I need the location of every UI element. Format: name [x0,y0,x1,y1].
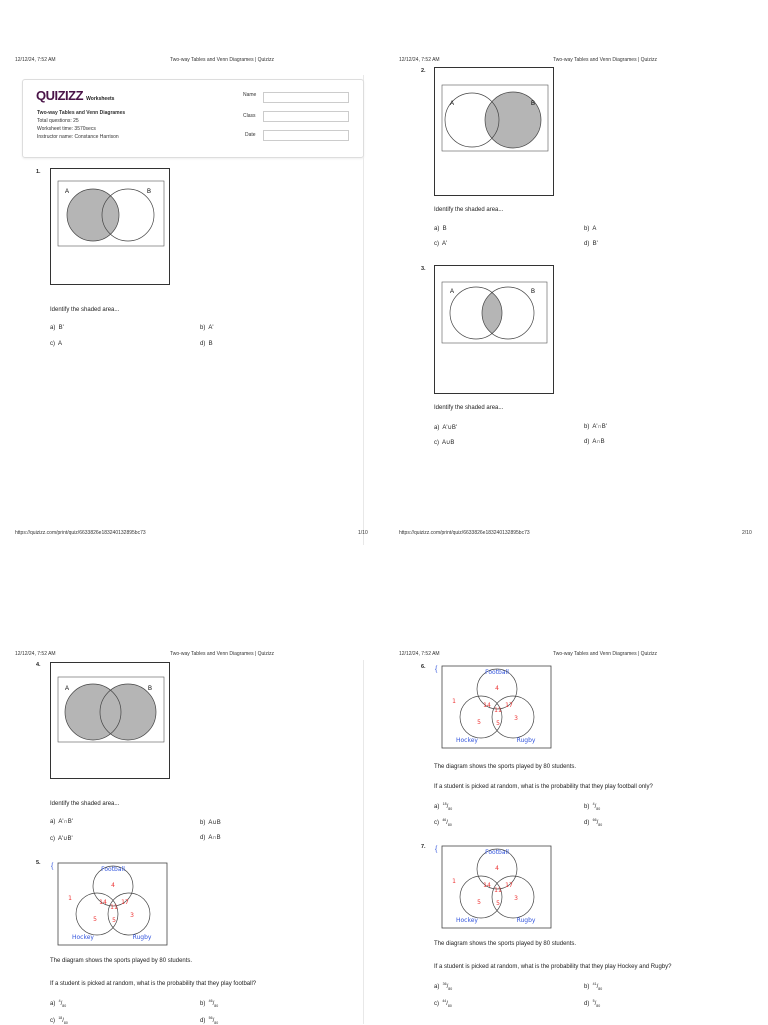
text: Two-way Tables and Venn Diagrames | Quizizz [170,651,274,657]
text: 1/10 [358,530,368,536]
page 4 header: 12/12/24, 7:52 AM [399,651,440,657]
worksheet details: Total questions: 25 [37,118,79,124]
question 3: b) A'∩B' [584,424,607,430]
sports venn diagram: 3 [130,912,134,919]
question 6 [421,664,653,827]
sports venn diagram: 1 [452,698,456,705]
question 6: b) 4 /80 [584,802,600,811]
logo: QUIZIZZ Worksheets [36,88,114,103]
question 6: a) 18 /80 [434,802,452,811]
sports venn diagram [435,666,552,748]
worksheet details: Instructor name: Constance Harrison [37,134,119,140]
sports venn diagram: Rugby [517,917,536,924]
question 4: c) A'∪B' [50,836,73,842]
worksheet info panel: Date [245,132,256,138]
sports venn diagram: 11 [494,707,502,714]
question 2: a) B [434,226,447,232]
question 7 [421,844,672,1008]
question 7: c) 44 /80 [434,999,452,1008]
sports venn diagram: Football [101,866,125,873]
sports venn diagram: 17 [505,702,513,709]
sports venn diagram: 5 [496,720,500,727]
question 3: d) A∩B [584,439,605,445]
page 2 header: 12/12/24, 7:52 AM [399,57,440,63]
sports venn diagram [435,846,552,928]
worksheet details: Worksheet time: 3570secs [37,126,96,132]
sports venn diagram: 14 [483,702,491,709]
sports venn diagram: { [435,846,438,853]
sports venn diagram: 4 [495,685,499,692]
question 1: c) A [50,341,62,347]
question 4: d) A∩B [200,835,221,841]
worksheet details: Two-way Tables and Venn Diagrames [37,110,125,116]
sports venn diagram: Football [485,849,509,856]
sports venn diagram: Rugby [133,934,152,941]
question 5: d) 56 /80 [200,1016,218,1025]
question 2: 2. [421,68,426,74]
venn diagram: union shaded [50,662,170,779]
question 5: b) 46 /80 [200,999,218,1008]
question 6: 6. [421,664,426,670]
question 1: 1. [36,169,41,175]
question 2: b) A [584,226,596,232]
question 3 [421,265,607,446]
sports venn diagram: Hockey [456,917,478,924]
sports venn diagram: 5 [477,899,481,906]
venn diagram: A shaded: B [147,189,151,195]
page 2 footer: https://quizizz.com/print/quiz/6633826e183240132895bc73 [399,530,530,536]
sports venn diagram: { [51,863,54,870]
sports venn diagram: 4 [495,865,499,872]
question 5: a) 4 /80 [50,999,66,1008]
venn diagram: B shaded [434,67,554,196]
question 7: If a student is picked at random, what is the probability that they play Hockey and Rugby? [434,964,671,970]
page 3 header: 12/12/24, 7:52 AM [15,651,56,657]
question 4: 4. [36,662,41,668]
worksheet info panel [22,79,364,158]
question 7: b) 41 /80 [584,982,602,991]
question 1: b) A' [200,325,214,331]
question 1: a) B' [50,325,64,331]
question 7: 7. [421,844,426,850]
venn diagram: B shaded: B [531,101,535,107]
question 5: c) 18 /80 [50,1016,68,1025]
sports venn diagram: 5 [112,917,116,924]
venn diagram: intersection shaded: B [531,289,535,295]
question 3: 3. [421,266,426,272]
question 6: If a student is picked at random, what is the probability that they play football only? [434,784,653,790]
question 2: Identify the shaded area... [434,207,503,213]
venn diagram: A shaded: A [65,189,69,195]
worksheet info panel: Class [243,113,256,119]
question 5: 5. [36,860,41,866]
sports venn diagram: 3 [514,715,518,722]
text: 2/10 [742,530,752,536]
question 7: d) 5 /80 [584,999,600,1008]
question 3: a) A'∪B' [434,425,457,431]
venn diagram: B shaded: A [450,101,454,107]
question 7: The diagram shows the sports played by 80 students. [434,941,576,947]
question 6: c) 46 /80 [434,818,452,827]
question 4 [36,662,221,842]
question 4: Identify the shaded area... [50,801,119,807]
sports venn diagram: 5 [477,719,481,726]
sports venn diagram: 17 [505,882,513,889]
question 5: The diagram shows the sports played by 80 students. [50,958,192,964]
question 2: c) A' [434,241,447,247]
sports venn diagram: 1 [452,878,456,885]
venn diagram: union shaded: A [65,686,69,692]
question 1 [36,168,214,347]
sports venn diagram: 4 [111,882,115,889]
text: Two-way Tables and Venn Diagrames | Quizizz [553,651,657,657]
text: Two-way Tables and Venn Diagrames | Quizizz [553,57,657,63]
sports venn diagram: 3 [514,895,518,902]
venn diagram: A shaded [50,168,170,285]
question 7: a) 36 /80 [434,982,452,991]
question 1: Identify the shaded area... [50,307,119,313]
question 2: d) B' [584,241,598,247]
sports venn diagram [51,862,168,946]
text: Two-way Tables and Venn Diagrames | Quizizz [170,57,274,63]
question 5 [36,860,256,1025]
question 1: d) B [200,341,213,347]
venn diagram: intersection shaded [434,265,554,394]
sports venn diagram: Hockey [456,737,478,744]
sports venn diagram: 17 [121,899,129,906]
sports venn diagram: 11 [110,904,118,911]
question 4: b) A∪B [200,820,221,826]
sports venn diagram: 11 [494,887,502,894]
venn diagram: intersection shaded: A [450,289,454,295]
worksheet details [37,110,125,140]
question 3: c) A∪B [434,440,454,446]
sports venn diagram: { [435,666,438,673]
question 4: a) A'∩B' [50,819,73,825]
venn diagram: union shaded: B [148,686,152,692]
sports venn diagram: Rugby [517,737,536,744]
page 1 header: 12/12/24, 7:52 AM [15,57,56,63]
name/class/date fields: Name [243,92,256,98]
question 5: If a student is picked at random, what is the probability that they play football? [50,981,256,987]
question 6: The diagram shows the sports played by 80 students. [434,764,576,770]
question 6: d) 66 /80 [584,818,602,827]
sports venn diagram: 5 [496,900,500,907]
page 1 footer: https://quizizz.com/print/quiz/6633826e183240132895bc73 [15,530,146,536]
sports venn diagram: 14 [483,882,491,889]
sports venn diagram: Football [485,669,509,676]
sports venn diagram: 1 [68,895,72,902]
question 2 [421,67,598,247]
sports venn diagram: 5 [93,916,97,923]
sports venn diagram: 14 [99,899,107,906]
sports venn diagram: Hockey [72,934,94,941]
question 3: Identify the shaded area... [434,405,503,411]
